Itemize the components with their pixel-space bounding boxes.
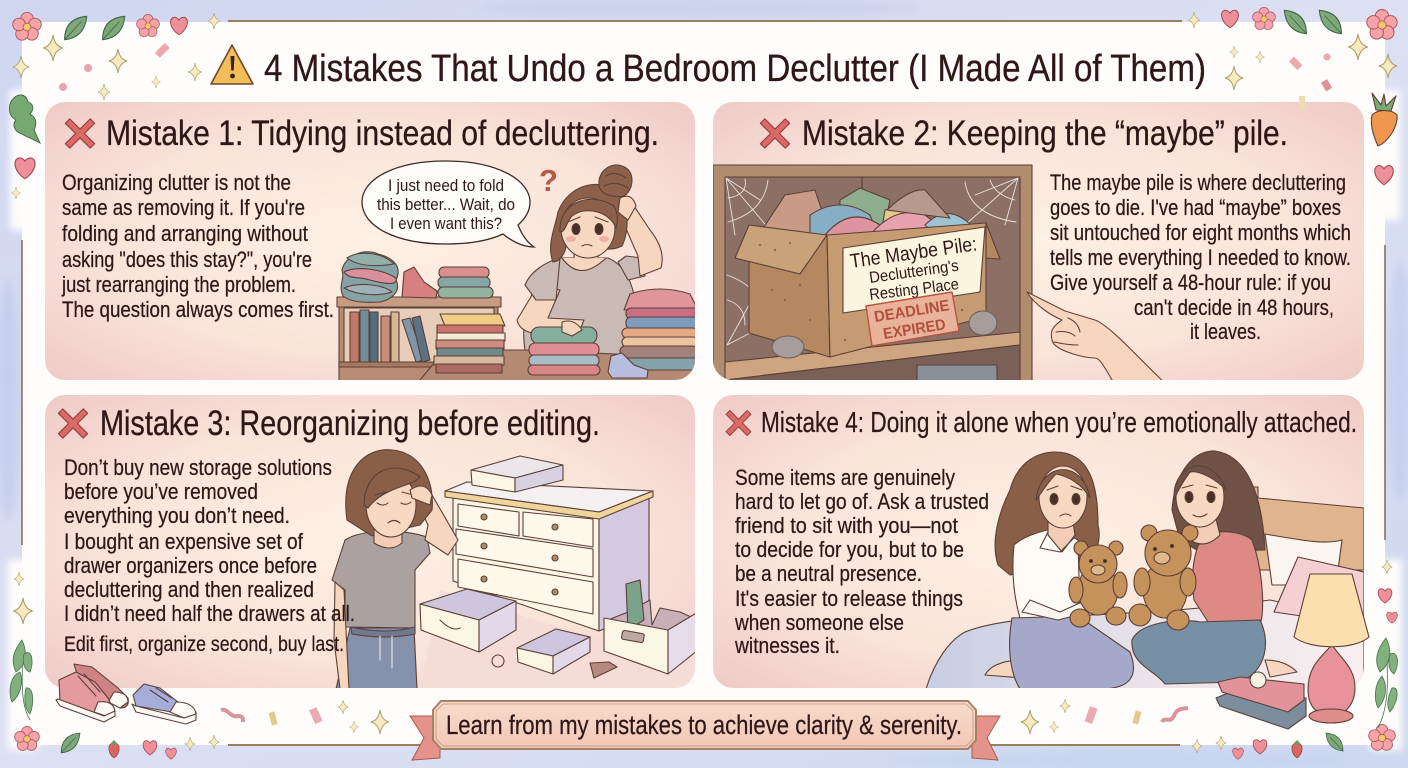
body text: mistake 3: everything you don’t need. [64,503,290,528]
lamp [1294,574,1369,723]
right teddy bear [1129,525,1198,630]
body text: mistake 1: same as removing it. If you're [62,195,305,220]
drawer organizer tray [471,456,563,492]
pink sneakers [56,664,128,722]
floor items [590,662,617,678]
body text: mistake 4: when someone else [734,610,904,635]
banner text: Learn from my mistakes to achieve clarity & serenity. [446,710,962,740]
body text: mistake 1: just rearranging the problem. [61,272,296,297]
dresser [445,482,653,631]
friend on right [1132,451,1297,684]
cardboard box [735,223,1000,357]
floor [420,590,695,688]
icon: warning triangle [211,45,253,84]
body text: mistake 4: be a neutral presence. [735,561,922,586]
body text: mistake 4: friend to sit with you—not [735,513,959,538]
box label sign: Resting Place [868,276,960,304]
body text: mistake 3: decluttering and then realized [64,577,314,602]
bed and blanket [926,600,1364,690]
shoe on shelf [402,267,437,298]
panel: mistake 1 [45,102,700,385]
body text: mistake 2: Give yourself a 48-hour rule: if you [1050,270,1331,295]
body text: mistake 3: drawer organizers once before [64,553,317,578]
blue sneaker [132,684,196,724]
illustration: woman tidying clothes [337,165,700,385]
icon: leaf branch right [1375,638,1397,728]
box of clutter [604,580,698,674]
body text: mistake 4: hard to let go of. Ask a trusted [735,489,989,514]
body text: mistake 4: It's easier to release things [735,586,963,611]
icon: red x [65,119,95,148]
panel: mistake 3 [45,395,698,724]
banner [410,701,1000,760]
clothes stack right [620,289,700,370]
speech bubble: I just need to fold [388,176,504,195]
body text: mistake 2: sit untouched for eight months which [1050,220,1351,245]
deadline expired stamp [866,292,959,346]
deadline expired stamp: EXPIRED [882,316,947,343]
shoes pair [56,664,196,724]
body text: mistake 2: it leaves. [1190,319,1261,344]
icon: red x [726,411,751,435]
decorations: top left [9,12,220,199]
woman with messy bun [517,165,662,355]
decorations: bottom right [1192,560,1397,759]
table [419,350,695,380]
panel: mistake 4 [713,395,1369,729]
body text: mistake 3 [64,455,355,656]
folded clothes under hand [528,321,600,375]
box label sign: Decluttering's [868,258,960,287]
body text: mistake 4: witnesses it. [734,633,840,658]
sneaker [608,353,648,378]
illustration: dusty box on shelf [713,165,1167,385]
book stack [434,314,505,373]
body text: mistake 2: can't decide in 48 hours, [1134,295,1334,320]
small drawer on floor [517,629,590,674]
body text: mistake 3: I didn’t need half the drawers at all. [64,601,355,626]
icon: red x [58,409,88,438]
body text: mistake 3: Edit first, organize second, buy last. [64,633,344,656]
speech bubble [362,161,534,247]
title text: 4 Mistakes That Undo a Bedroom Declutter (I Made All of Them) [264,48,1206,90]
body text: mistake 4 [734,465,989,658]
left teddy bear [1069,541,1127,627]
pointing hand [1027,292,1167,385]
illustration: two friends with teddy bears on bed [926,451,1364,690]
question mark: ? [539,163,558,198]
body text: mistake 1: asking "does this stay?", you're [62,247,312,272]
decorations: bottom left [10,572,219,759]
speech bubble: this better... Wait, do [377,195,515,214]
icon: lobed leaf [9,95,40,143]
cobwebs [726,178,1018,345]
icon: leaf branch [10,640,33,720]
messy clothes pile [341,252,398,302]
deadline expired stamp: DEADLINE [873,297,951,326]
illustration: dresser and tired woman [332,450,698,689]
dust bunnies [772,311,997,358]
decorations: top right [1188,7,1397,185]
body text: mistake 4: to decide for you, but to be [735,537,964,562]
body text: mistake 2: goes to die. I've had “maybe” boxes [1050,195,1341,220]
decorations: bottom confetti left [221,700,389,734]
body text: mistake 3: Don’t buy new storage solutions [64,455,332,480]
pillows [1265,534,1364,625]
box label sign [843,227,985,313]
empty drawer on floor [420,589,516,652]
folded stack on shelf [438,267,493,298]
body text: mistake 1: folding and arranging without [62,221,309,246]
icon: carrot [1371,93,1397,146]
heading: mistake 3: Mistake 3: Reorganizing before editing. [100,404,600,443]
body text: mistake 1: The question always comes first. [62,297,334,322]
icon: red x [760,119,790,148]
body text: mistake 2 [1050,170,1351,344]
heading: mistake 1: Mistake 1: Tidying instead of decluttering. [106,114,659,153]
woman with hand on forehead [332,450,458,689]
bookcase with books [337,297,501,385]
body text: mistake 1 [61,170,334,322]
body text: mistake 1: Organizing clutter is not the [62,170,291,195]
body text: mistake 3: before you’ve removed [64,479,258,504]
body text: mistake 4: Some items are genuinely [735,465,956,490]
body text: mistake 3: I bought an expensive set of [64,529,304,554]
ribbon ends [410,716,1000,760]
decorations: bottom confetti right [1021,699,1188,734]
body text: mistake 2: The maybe pile is where decluttering [1050,170,1346,195]
shelf frame [713,165,1032,381]
headboard [1247,487,1364,570]
books with ornament [1216,672,1306,729]
title [211,45,1206,90]
speech bubble: I even want this? [390,214,502,233]
clothes in box [764,188,970,234]
heading: mistake 2: Mistake 2: Keeping the “maybe” pile. [802,114,1288,153]
friend on left [985,452,1133,689]
panel: mistake 2 [713,102,1364,385]
box label sign: The Maybe Pile: [849,233,978,273]
